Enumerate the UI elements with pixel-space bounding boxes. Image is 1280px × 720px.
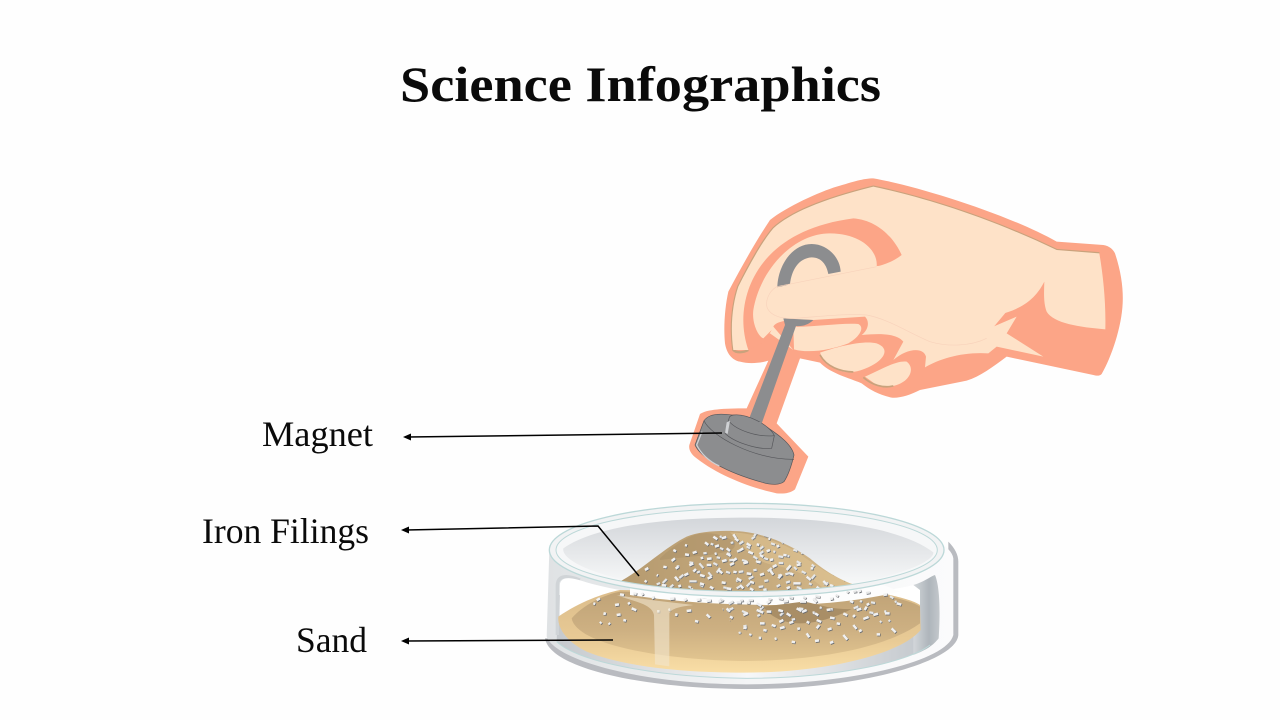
bottom rim line: [557, 642, 930, 678]
finger crescent shadow: [743, 218, 902, 350]
right glass wall: [913, 575, 940, 655]
dish floor: [557, 595, 939, 678]
title: Science Infographics: [400, 56, 881, 112]
label: Sand: Sand: [296, 620, 367, 660]
arrow: iron filings: [401, 526, 639, 576]
rim band: [553, 506, 941, 594]
curled fingers: [793, 324, 861, 351]
sand bed: [558, 590, 921, 673]
hand outer salmon outline: [689, 178, 1123, 494]
illustration: petri dish with sand and iron filings: [545, 503, 958, 689]
illustration: hand holding magnet: [689, 178, 1123, 494]
label: Iron Filings: Iron Filings: [202, 511, 369, 551]
magnet ring: [777, 244, 841, 288]
finger tan lines: [820, 355, 893, 387]
sand inner area: [572, 592, 920, 661]
hand skin: [732, 187, 1105, 377]
left glass wall: [557, 577, 580, 635]
inner gray shade: [563, 518, 933, 592]
thumb faint line: [767, 267, 987, 345]
magnet stem: [747, 318, 813, 428]
sand pile: [618, 531, 855, 592]
pile shaded facet: [730, 532, 855, 588]
dish window: [559, 578, 920, 620]
arrow: magnet: [403, 433, 722, 440]
white strip: [630, 585, 900, 605]
dish base: [547, 504, 953, 684]
dish shadow: [545, 542, 958, 689]
arrow: sand: [401, 638, 613, 644]
finger gaps shadow: [773, 317, 926, 390]
dish back interior: [550, 505, 943, 595]
dark sand hump: [763, 602, 852, 623]
label: Magnet: Magnet: [262, 414, 373, 454]
iron filings: [589, 532, 902, 644]
magnet base: [695, 414, 794, 484]
hand tan edge line: [732, 187, 1099, 352]
thumb: [767, 263, 1013, 343]
glass reflection: [617, 595, 693, 666]
